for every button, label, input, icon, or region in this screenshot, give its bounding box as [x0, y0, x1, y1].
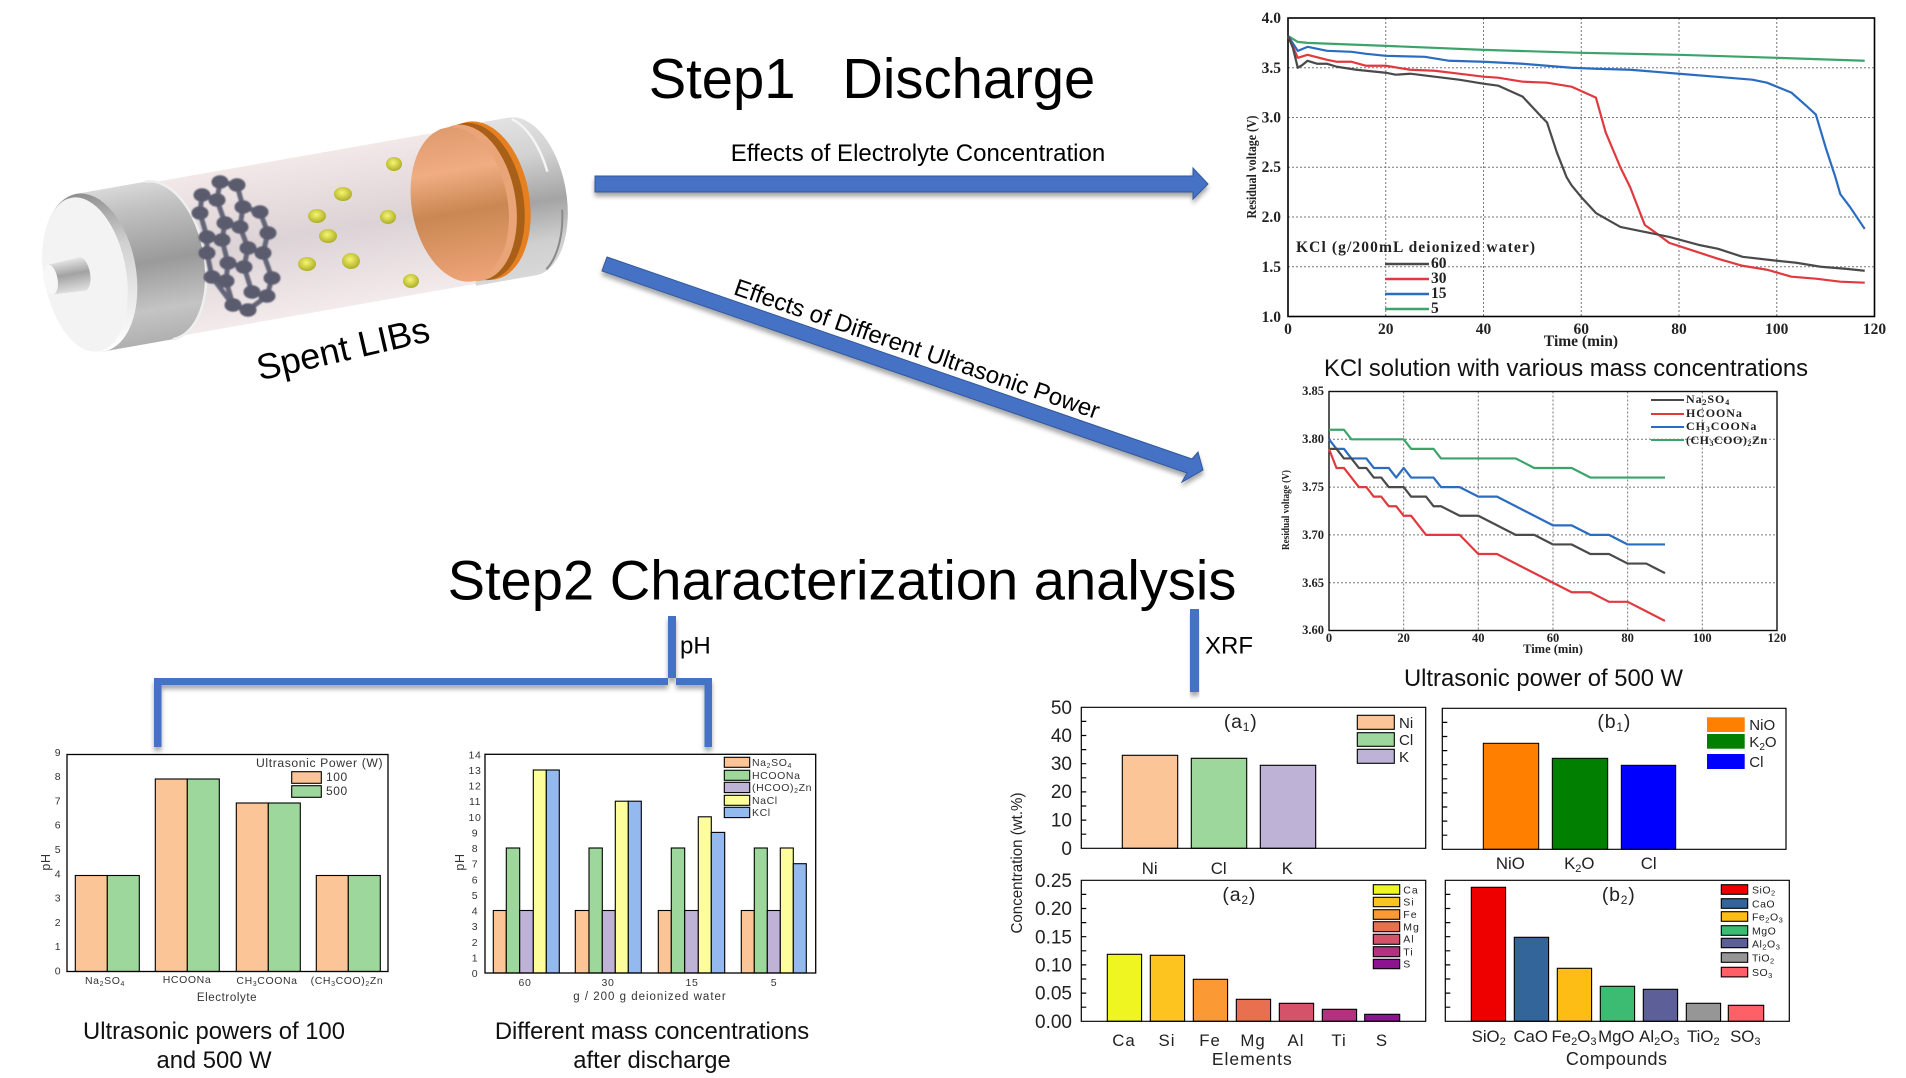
bar chart a1: 30	[1051, 754, 1072, 775]
bar chart a2: )	[1249, 884, 1256, 906]
bar chart b2: MgO	[1752, 926, 1776, 938]
bar chart b2: SO	[1752, 967, 1768, 979]
bar chart b1: 2	[1759, 742, 1765, 753]
bar chart: pH at mass concentrations: 15	[686, 977, 698, 989]
bar chart a1: 10	[1051, 810, 1072, 832]
bar chart: pH at mass concentrations: 7	[472, 859, 478, 871]
line chart: KCl solution residual voltage	[1245, 10, 1886, 350]
line chart: ultrasonic power 500 W: 20	[1397, 631, 1410, 645]
bar chart: pH at mass concentrations: 4	[788, 763, 792, 770]
bar chart a1: K	[1399, 749, 1409, 766]
bar chart b1	[1442, 708, 1786, 875]
bar chart a2: 0.25	[1035, 871, 1072, 892]
title: step 2: Step2 Characterization analysis	[448, 548, 1236, 612]
line chart: ultrasonic power 500 W: 3.80	[1302, 432, 1324, 446]
line chart: KCl solution residual voltage: 30	[1431, 270, 1447, 287]
bar chart a2: 2	[1241, 893, 1249, 907]
bar chart: pH at mass concentrations: 11	[469, 796, 481, 808]
line chart: ultrasonic power 500 W: 40	[1472, 631, 1485, 645]
battery illustration: spent LIBs	[29, 107, 580, 360]
line chart: KCl solution residual voltage: 20	[1378, 321, 1394, 338]
bar chart a2: Mg	[1240, 1031, 1266, 1050]
line chart: ultrasonic power 500 W: SO	[1707, 392, 1725, 406]
bar chart: pH at mass concentrations: g / 200 g deionized water	[573, 991, 727, 1003]
line chart: ultrasonic power 500 W: Residual voltage (V)	[1280, 470, 1292, 550]
bar chart: pH at ultrasonic powers: 7	[55, 795, 61, 807]
bar chart a1: (a	[1224, 711, 1243, 733]
bar chart b2: Fe	[1552, 1027, 1571, 1046]
line chart: KCl solution residual voltage: 60	[1431, 255, 1447, 272]
bar chart: pH at mass concentrations: 12	[469, 781, 481, 793]
bar chart b1: K	[1749, 734, 1759, 751]
bar chart: pH at mass concentrations	[453, 749, 816, 1003]
bar chart: pH at mass concentrations: 13	[469, 765, 481, 777]
bar chart: pH at mass concentrations: 5	[472, 890, 478, 902]
bar chart: pH at ultrasonic powers: Na	[85, 975, 100, 987]
bar chart: pH at ultrasonic powers: 2	[100, 981, 104, 988]
bar chart: pH at ultrasonic powers: 2	[365, 981, 370, 988]
bar chart b2: 2	[1762, 942, 1767, 952]
bar chart a2: Mg	[1403, 922, 1420, 934]
bar chart: pH at ultrasonic powers: 500	[326, 784, 348, 798]
line chart: KCl solution residual voltage: 1.5	[1262, 259, 1281, 276]
bar chart b2: 3	[1768, 971, 1773, 980]
bar chart: pH at ultrasonic powers: (CH	[311, 975, 331, 987]
caption: ultrasonic powers of 100 and 500 W: and 500 W	[156, 1047, 272, 1074]
bar chart a1: Cl	[1211, 859, 1227, 878]
label: effects of different ultrasonic power: Effects of Different Ultrasonic Power	[731, 274, 1103, 425]
bar chart: pH at mass concentrations: Na	[752, 757, 767, 769]
bar chart a2: Ti	[1331, 1031, 1347, 1050]
bar chart a2: 0.05	[1035, 984, 1072, 1004]
line chart: ultrasonic power 500 W: 80	[1621, 631, 1634, 645]
bar chart b2: (b	[1602, 884, 1621, 906]
line chart: ultrasonic power 500 W: 2	[1702, 398, 1707, 407]
bar chart: pH at ultrasonic powers	[39, 747, 388, 1004]
bar chart: pH at ultrasonic powers: 4	[55, 868, 61, 880]
bar chart b2: 3	[1754, 1036, 1760, 1048]
bar chart: pH at ultrasonic powers: HCOONa	[163, 974, 211, 986]
bar chart a2: Si	[1159, 1031, 1175, 1050]
bar chart a2: Ca	[1403, 884, 1419, 896]
line chart: ultrasonic power 500 W: 3	[1710, 439, 1714, 448]
bar chart a2: S	[1376, 1031, 1388, 1050]
bar chart b1: O	[1765, 734, 1777, 751]
line chart: KCl solution residual voltage: 4.0	[1262, 10, 1281, 27]
line chart: KCl solution residual voltage: KCl (g/200mL deionized water)	[1296, 239, 1535, 256]
label: effects of electrolyte concentration: Effects of Electrolyte Concentration	[731, 140, 1105, 167]
bar chart b2: 2	[1621, 893, 1628, 907]
caption: different mass concentrations after discharge: Different mass concentrations	[495, 1018, 809, 1045]
line chart: ultrasonic power 500 W: Na	[1686, 392, 1702, 406]
bar chart b2: 3	[1776, 942, 1780, 952]
bar chart a1: Ni	[1142, 859, 1158, 878]
bar chart a2: Elements	[1212, 1049, 1293, 1069]
line chart: KCl solution residual voltage: 2.0	[1262, 209, 1281, 226]
arrow: ultrasonic power	[602, 257, 1203, 482]
bar chart: pH at mass concentrations: HCOONa	[752, 770, 801, 782]
line chart: ultrasonic power 500 W: 3.75	[1302, 480, 1324, 494]
line chart: ultrasonic power 500 W: 0	[1326, 631, 1332, 645]
bar chart: pH at ultrasonic powers: 3	[253, 981, 257, 988]
bar chart b2: SiO	[1472, 1027, 1500, 1046]
line chart: ultrasonic power 500 W: 60	[1547, 631, 1559, 645]
bar chart a2: 0.00	[1035, 1012, 1072, 1033]
line chart: ultrasonic power 500 W: 3.85	[1302, 384, 1324, 398]
bar chart: pH at ultrasonic powers: 100	[326, 770, 348, 784]
line chart: ultrasonic power 500 W: 4	[1725, 398, 1730, 407]
bar chart a1	[1051, 698, 1426, 878]
bar chart b2: O	[1577, 1027, 1590, 1046]
bar chart: pH at ultrasonic powers: COO)	[336, 975, 365, 987]
bar chart: pH at mass concentrations: NaCl	[752, 795, 778, 807]
bar chart b2	[1445, 880, 1789, 1069]
caption: ultrasonic powers of 100 and 500 W	[83, 1018, 345, 1074]
line chart: KCl solution residual voltage: 3.0	[1262, 110, 1281, 126]
bar chart b1: 2	[1575, 863, 1581, 875]
bar chart b2: )	[1628, 884, 1636, 906]
line chart: KCl solution residual voltage: 1.0	[1262, 309, 1281, 326]
line chart: ultrasonic power 500 W: 3.65	[1302, 576, 1324, 590]
bar chart: pH at mass concentrations: SO	[771, 757, 788, 769]
bar chart b2: 2	[1654, 1036, 1660, 1048]
bar chart: pH at mass concentrations: 3	[472, 921, 478, 933]
bar chart: pH at ultrasonic powers: Electrolyte	[197, 992, 257, 1004]
bar chart b2: MgO	[1598, 1027, 1634, 1046]
caption: ultrasonic power of 500 W: Ultrasonic power of 500 W	[1404, 665, 1684, 692]
line chart: ultrasonic power 500 W: 100	[1693, 631, 1712, 645]
bar chart: pH at mass concentrations: 14	[469, 749, 481, 761]
bar chart b2: Compounds	[1566, 1049, 1667, 1069]
bar chart: pH at mass concentrations: 0	[472, 968, 478, 980]
bar chart a2: 0.15	[1035, 928, 1072, 948]
line chart: KCl solution residual voltage: Time (min)	[1544, 333, 1618, 350]
bar chart: pH at ultrasonic powers: COONa	[257, 975, 298, 987]
bar chart b2: O	[1660, 1027, 1673, 1046]
bar chart: pH at mass concentrations: Zn	[799, 782, 812, 794]
bar chart: pH at mass concentrations: pH	[453, 853, 467, 871]
line chart: ultrasonic power 500 W	[1280, 384, 1786, 656]
bar chart b1: )	[1624, 711, 1631, 733]
bar chart b1: NiO	[1496, 854, 1525, 873]
bar chart: pH at ultrasonic powers: CH	[236, 975, 253, 987]
bar chart: pH at ultrasonic powers: 9	[55, 747, 61, 759]
line chart: KCl solution residual voltage: 2.5	[1262, 159, 1281, 176]
caption: different mass concentrations after discharge: after discharge	[573, 1047, 731, 1074]
line chart: ultrasonic power 500 W: 3.60	[1302, 623, 1324, 637]
line chart: ultrasonic power 500 W: 3	[1706, 425, 1711, 434]
bar chart a1: )	[1250, 711, 1258, 733]
bar chart b2: O	[1770, 912, 1779, 924]
bar chart a2: Ca	[1112, 1031, 1136, 1050]
line chart: ultrasonic power 500 W: COO)	[1714, 433, 1747, 447]
line chart: ultrasonic power 500 W: Time (min)	[1523, 642, 1583, 656]
connector: XRF line	[1190, 609, 1199, 692]
bar chart b2: TiO	[1752, 952, 1770, 964]
line chart: KCl solution residual voltage: 80	[1671, 321, 1687, 338]
bar chart a2: 0.20	[1035, 899, 1072, 920]
caption: different mass concentrations after discharge	[495, 1018, 809, 1074]
line chart: ultrasonic power 500 W: (CH	[1686, 433, 1710, 447]
bar chart a1: Ni	[1399, 715, 1413, 732]
bar chart: pH at ultrasonic powers: pH	[39, 853, 53, 871]
caption: ultrasonic powers of 100 and 500 W: Ultrasonic powers of 100	[83, 1018, 345, 1045]
line chart: KCl solution residual voltage: Residual voltage (V)	[1245, 115, 1260, 218]
bar chart b2: Al	[1752, 938, 1762, 950]
bar chart: pH at ultrasonic powers: 8	[55, 771, 61, 783]
bar chart a1: 0	[1061, 839, 1072, 860]
bar chart: pH at mass concentrations: 60	[519, 977, 531, 989]
bar chart: pH at ultrasonic powers: 6	[55, 820, 61, 832]
line chart: KCl solution residual voltage: 0	[1284, 321, 1292, 338]
line chart: ultrasonic power 500 W: 120	[1768, 631, 1786, 645]
bar chart: pH at mass concentrations: 2	[794, 788, 799, 795]
bar chart b2: 2	[1500, 1036, 1506, 1048]
bar chart: pH at mass concentrations: 6	[472, 874, 478, 886]
label: spent LIBs: Spent LIBs	[252, 309, 433, 388]
bar chart: pH at mass concentrations: 5	[771, 977, 777, 989]
bar chart b2: CaO	[1752, 898, 1775, 910]
bar chart b2: 2	[1713, 1036, 1720, 1048]
bar chart b2: 3	[1590, 1036, 1596, 1048]
bar chart: pH at ultrasonic powers: 0	[55, 966, 61, 978]
bar chart b2: Fe	[1752, 912, 1765, 924]
bar chart a1: Cl	[1399, 732, 1413, 749]
line chart: ultrasonic power 500 W: CH	[1686, 419, 1706, 433]
label: pH: pH	[680, 632, 711, 660]
bar chart: pH at mass concentrations: 8	[472, 843, 478, 855]
line chart: KCl solution residual voltage: 5	[1431, 300, 1439, 317]
bar chart: pH at ultrasonic powers: 2	[55, 917, 61, 929]
line chart: ultrasonic power 500 W: Zn	[1752, 433, 1768, 447]
bar chart b2: 2	[1771, 888, 1776, 898]
line chart: ultrasonic power 500 W: 3.70	[1302, 528, 1324, 542]
line chart: KCl solution residual voltage: 3.5	[1262, 60, 1281, 77]
axis label: concentration: Concentration (wt.%)	[1009, 792, 1026, 934]
bar chart b1: Cl	[1641, 854, 1657, 873]
bar chart: pH at mass concentrations: 30	[602, 977, 614, 989]
line chart: ultrasonic power 500 W: 2	[1747, 439, 1752, 448]
bar chart: pH at mass concentrations: 10	[469, 812, 481, 824]
bar chart b2: SO	[1730, 1027, 1754, 1046]
bar chart b2: 2	[1571, 1036, 1577, 1048]
bar chart b2: 2	[1770, 956, 1775, 966]
bar chart a2: Al	[1403, 934, 1415, 946]
bar chart: pH at ultrasonic powers: Zn	[370, 975, 383, 987]
bar chart: pH at mass concentrations: 9	[472, 827, 478, 839]
connector: pH bracket	[154, 616, 712, 747]
bar chart: pH at ultrasonic powers: 5	[55, 844, 61, 856]
bar chart b2: 3	[1779, 916, 1783, 924]
bar chart a2	[1035, 871, 1426, 1069]
bar chart: pH at ultrasonic powers: 1	[55, 941, 61, 953]
bar chart a2: Al	[1288, 1031, 1304, 1050]
bar chart b2: CaO	[1513, 1027, 1548, 1046]
bar chart a2: 0.10	[1035, 956, 1072, 976]
line chart: KCl solution residual voltage: 40	[1476, 321, 1492, 338]
line chart: KCl solution residual voltage: 15	[1431, 285, 1447, 302]
bar chart b2: 2	[1765, 916, 1770, 924]
caption: KCl solution: KCl solution with various mass concentrations	[1324, 355, 1808, 382]
bar chart: pH at ultrasonic powers: SO	[104, 975, 120, 987]
bar chart b1: (b	[1597, 711, 1616, 733]
bar chart a2: Ti	[1403, 946, 1414, 958]
bar chart: pH at mass concentrations: 4	[472, 906, 478, 918]
bar chart a1: 50	[1051, 698, 1072, 719]
bar chart a1: 40	[1051, 726, 1072, 747]
bar chart: pH at mass concentrations: KCl	[752, 807, 771, 819]
bar chart b1: NiO	[1749, 717, 1775, 734]
line chart: KCl solution residual voltage: 100	[1765, 321, 1789, 338]
bar chart a2: Fe	[1199, 1031, 1221, 1050]
bar chart a1: 1	[1243, 720, 1250, 734]
bar chart b2: 3	[1673, 1036, 1679, 1048]
bar chart b2: Al	[1639, 1027, 1654, 1046]
bar chart a2: (a	[1222, 884, 1241, 906]
bar chart b2: SiO	[1752, 884, 1771, 896]
bar chart b1: O	[1581, 854, 1594, 873]
bar chart b1: 1	[1616, 720, 1624, 734]
bar chart b1: K	[1564, 854, 1575, 873]
bar chart a1: 20	[1051, 782, 1072, 803]
line chart: KCl solution residual voltage: 60	[1574, 321, 1589, 338]
bar chart: pH at ultrasonic powers: 3	[55, 893, 61, 905]
bar chart b2: O	[1767, 938, 1776, 950]
bar chart b1: Cl	[1749, 754, 1763, 771]
bar chart: pH at mass concentrations: (HCOO)	[752, 782, 794, 794]
arrow: electrolyte concentration	[595, 168, 1208, 199]
bar chart: pH at ultrasonic powers: 3	[331, 981, 336, 988]
line chart: ultrasonic power 500 W: HCOONa	[1686, 406, 1743, 420]
bar chart a2: Si	[1403, 896, 1415, 908]
bar chart: pH at ultrasonic powers: Ultrasonic Power (W)	[256, 756, 383, 770]
bar chart: pH at mass concentrations: 2	[767, 763, 771, 770]
bar chart: pH at ultrasonic powers: 4	[120, 981, 125, 988]
bar chart a1: K	[1282, 859, 1293, 878]
line chart: ultrasonic power 500 W: COONa	[1711, 419, 1757, 433]
bar chart: pH at mass concentrations: 2	[472, 937, 478, 949]
line chart: KCl solution residual voltage: 120	[1863, 321, 1886, 338]
title: step 1: Step1 Discharge	[649, 47, 1095, 110]
label: XRF: XRF	[1205, 632, 1253, 660]
bar chart: pH at mass concentrations: 1	[472, 952, 478, 964]
bar chart a2: S	[1403, 958, 1411, 970]
bar chart b2: TiO	[1687, 1027, 1713, 1046]
bar chart a2: Fe	[1403, 909, 1418, 921]
